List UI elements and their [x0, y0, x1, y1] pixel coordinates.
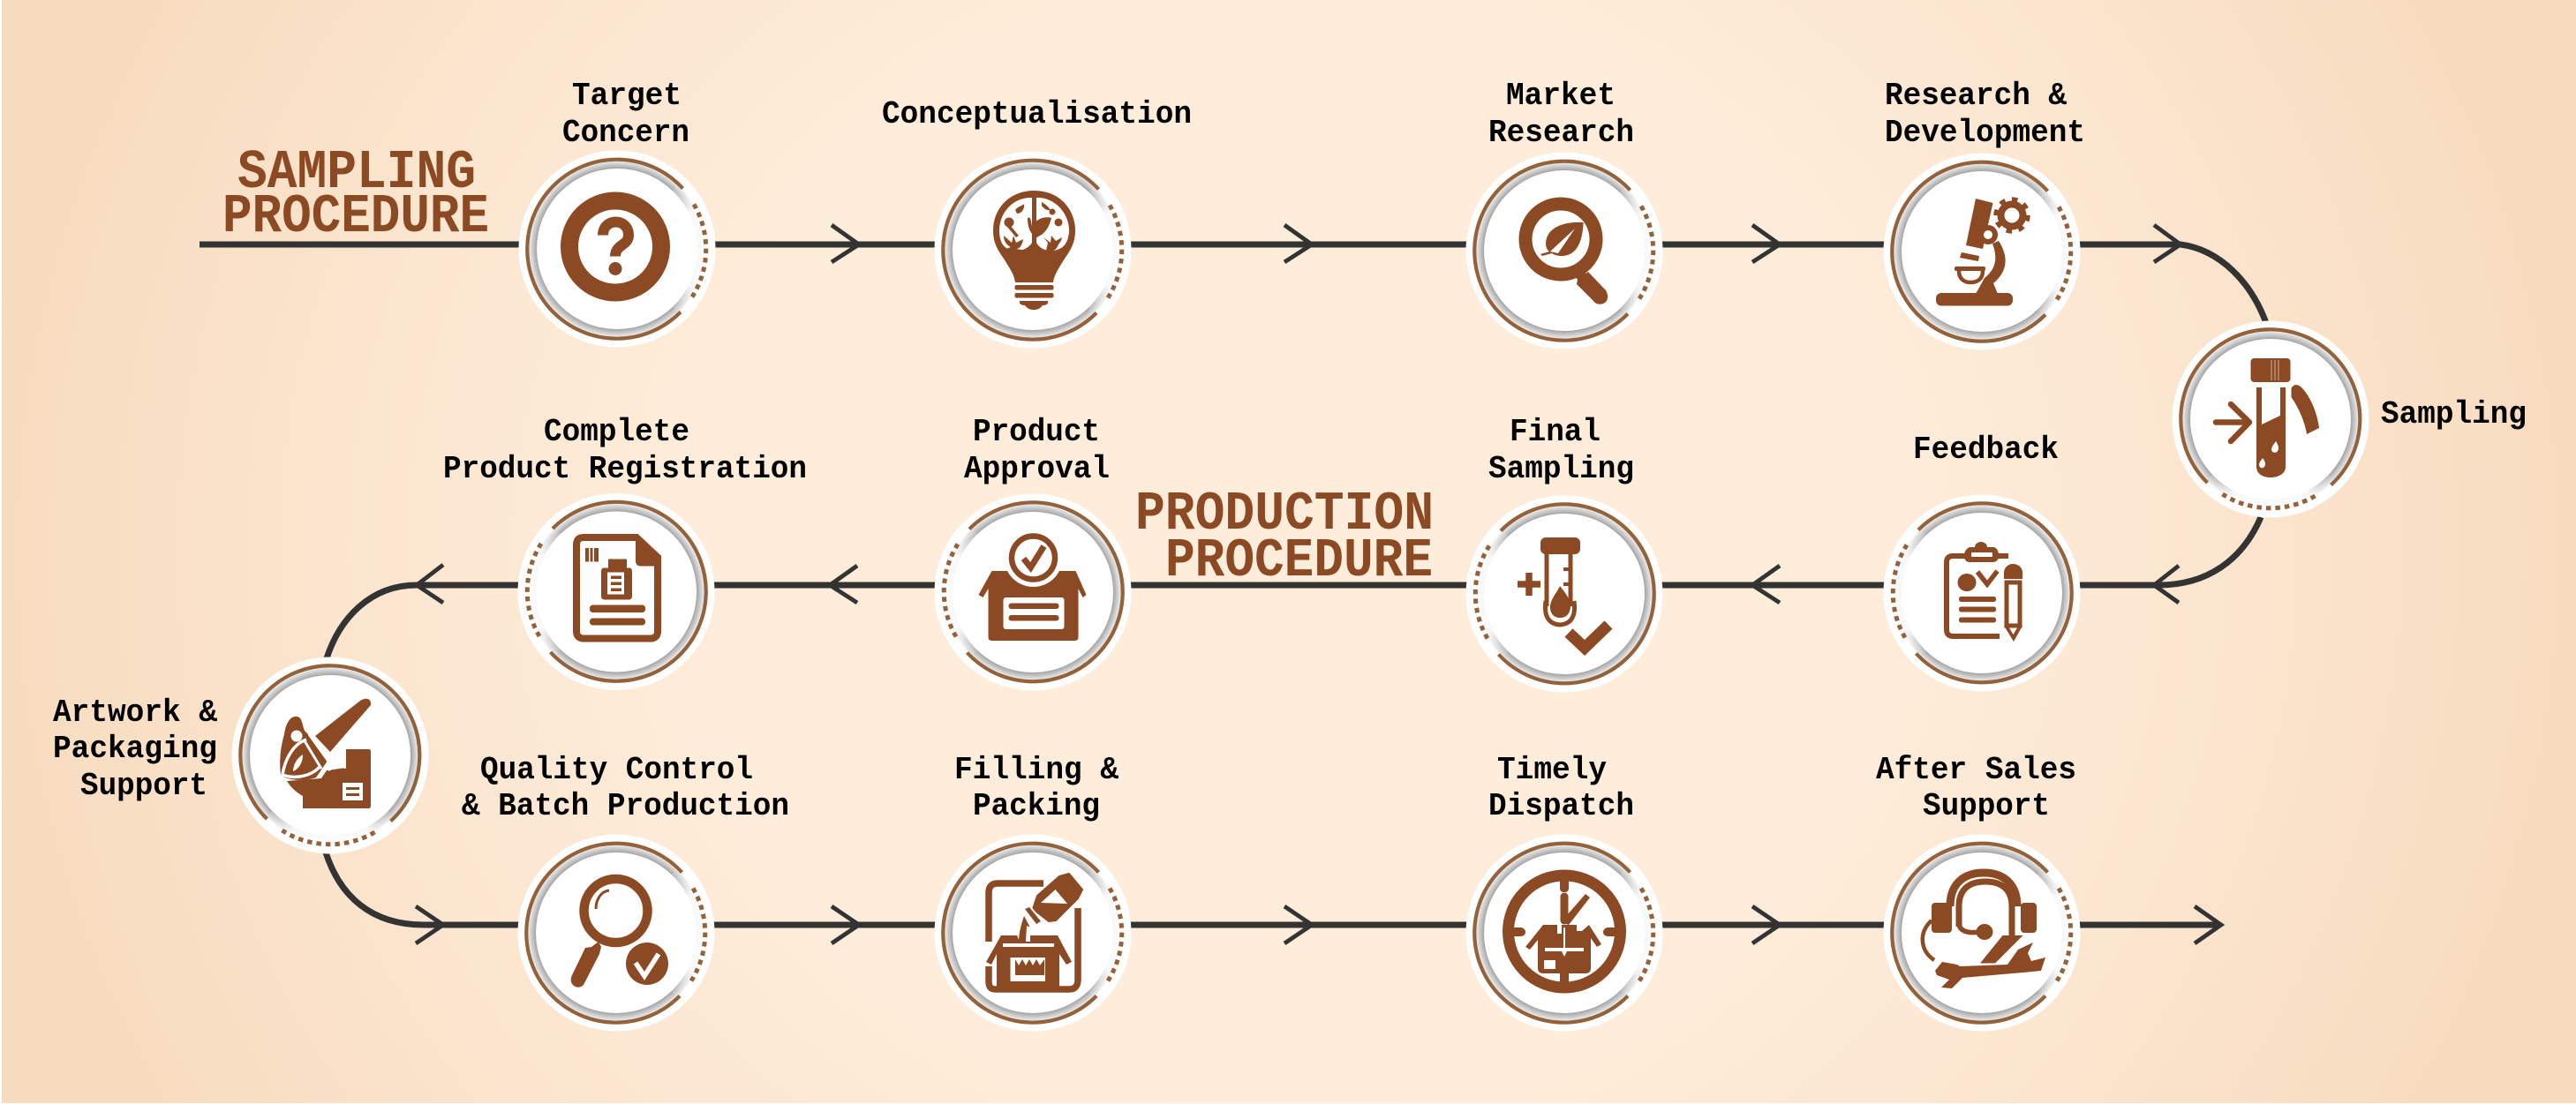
label: artwork and packaging support: Artwork &	[53, 695, 217, 731]
icon: tube with check	[1518, 537, 1608, 648]
step: sampling	[2172, 321, 2527, 517]
heading: sampling procedure	[222, 141, 489, 248]
badge: quality control and batch production	[517, 835, 715, 1031]
step: complete product registration	[443, 414, 807, 690]
label: sampling: Sampling	[2381, 396, 2527, 432]
connector path: dispatch row	[326, 852, 2221, 943]
icon: clock with parcel	[1508, 875, 1621, 988]
badge: filling and packing	[934, 835, 1132, 1031]
badge: target concern	[519, 150, 715, 348]
badge: product approval	[934, 494, 1132, 690]
label: final sampling: Sampling	[1488, 451, 1634, 487]
icon: magnifier with leaf	[1525, 204, 1608, 304]
step: artwork and packaging support	[53, 657, 429, 854]
step: timely dispatch	[1465, 752, 1663, 1031]
label: quality control and batch production: & Batch Production	[462, 788, 789, 824]
icon: magnifier with check badge	[571, 879, 668, 988]
label: after sales support: After Sales	[1876, 752, 2076, 788]
heading: production procedure: PROCEDURE	[1165, 529, 1433, 592]
badge: after sales support	[1884, 835, 2080, 1031]
label: quality control and batch production: Quality Control	[480, 752, 753, 788]
label: artwork and packaging support: Packaging	[53, 731, 217, 767]
icon: headset and wrench	[1923, 873, 2045, 988]
badge: sampling	[2172, 321, 2369, 517]
label: final sampling	[1488, 414, 1634, 487]
label: research and development: Development	[1885, 115, 2085, 151]
icon: test tube sample	[2216, 358, 2319, 477]
label: target concern: Target	[572, 78, 682, 114]
label: complete product registration: Product Registration	[443, 451, 807, 487]
label: filling and packing: Filling &	[954, 752, 1119, 788]
badge: complete product registration	[517, 493, 715, 690]
icon: light bulb with brain and leaves	[993, 191, 1075, 310]
heading: sampling procedure: SAMPLING	[237, 141, 476, 204]
icon: bottle filling box	[986, 874, 1082, 991]
label: after sales support	[1876, 752, 2076, 824]
heading: sampling procedure: PROCEDURE	[222, 185, 489, 248]
icon: brush and box	[280, 699, 371, 808]
badge: research and development	[1884, 154, 2080, 349]
label: conceptualisation: Conceptualisation	[882, 96, 1192, 132]
step: market research	[1465, 78, 1663, 349]
badge: final sampling	[1465, 496, 1663, 692]
icon: registration document	[576, 537, 660, 639]
badge: artwork and packaging support	[231, 657, 429, 854]
connector path: sampling row	[200, 225, 2266, 323]
icon: microscope and gear	[1936, 199, 2028, 305]
label: final sampling: Final	[1510, 414, 1601, 450]
icon: approved box	[978, 529, 1086, 641]
step: conceptualisation	[882, 96, 1192, 348]
heading: production procedure	[1135, 483, 1434, 592]
step: quality control and batch production	[462, 752, 789, 1031]
label: after sales support: Support	[1923, 788, 2050, 824]
label: feedback: Feedback	[1913, 432, 2059, 468]
label: artwork and packaging support	[53, 695, 217, 804]
label: target concern: Concern	[562, 115, 689, 151]
heading: production procedure: PRODUCTION	[1135, 483, 1434, 545]
icon: question mark	[569, 201, 661, 293]
label: complete product registration	[443, 414, 807, 487]
step: target concern	[519, 78, 715, 348]
label: quality control and batch production	[462, 752, 789, 824]
step: after sales support	[1876, 752, 2080, 1031]
label: timely dispatch: Timely	[1497, 752, 1607, 788]
label: research and development: Research &	[1885, 78, 2067, 114]
badge: feedback	[1884, 494, 2080, 692]
badge: conceptualisation	[934, 152, 1132, 348]
label: filling and packing	[954, 752, 1119, 824]
label: complete product registration: Complete	[544, 414, 689, 450]
step: feedback	[1884, 432, 2080, 692]
badge: market research	[1465, 152, 1663, 349]
connector path: production row	[327, 517, 2261, 658]
label: market research: Market	[1506, 78, 1616, 114]
step: filling and packing	[934, 752, 1132, 1031]
step: final sampling	[1465, 414, 1663, 692]
label: product approval: Product	[973, 414, 1100, 450]
label: timely dispatch	[1488, 752, 1634, 824]
label: timely dispatch: Dispatch	[1488, 788, 1634, 824]
label: filling and packing: Packing	[973, 788, 1100, 824]
label: research and development	[1885, 78, 2085, 151]
icon: clipboard and pencil	[1947, 542, 2026, 644]
label: target concern	[562, 78, 689, 151]
step: product approval	[934, 414, 1132, 690]
badge: timely dispatch	[1465, 835, 1663, 1031]
label: artwork and packaging support: Support	[80, 768, 207, 804]
label: product approval	[964, 414, 1110, 487]
label: market research	[1488, 78, 1634, 151]
label: product approval: Approval	[964, 451, 1110, 487]
step: research and development	[1884, 78, 2085, 349]
label: market research: Research	[1488, 115, 1634, 151]
